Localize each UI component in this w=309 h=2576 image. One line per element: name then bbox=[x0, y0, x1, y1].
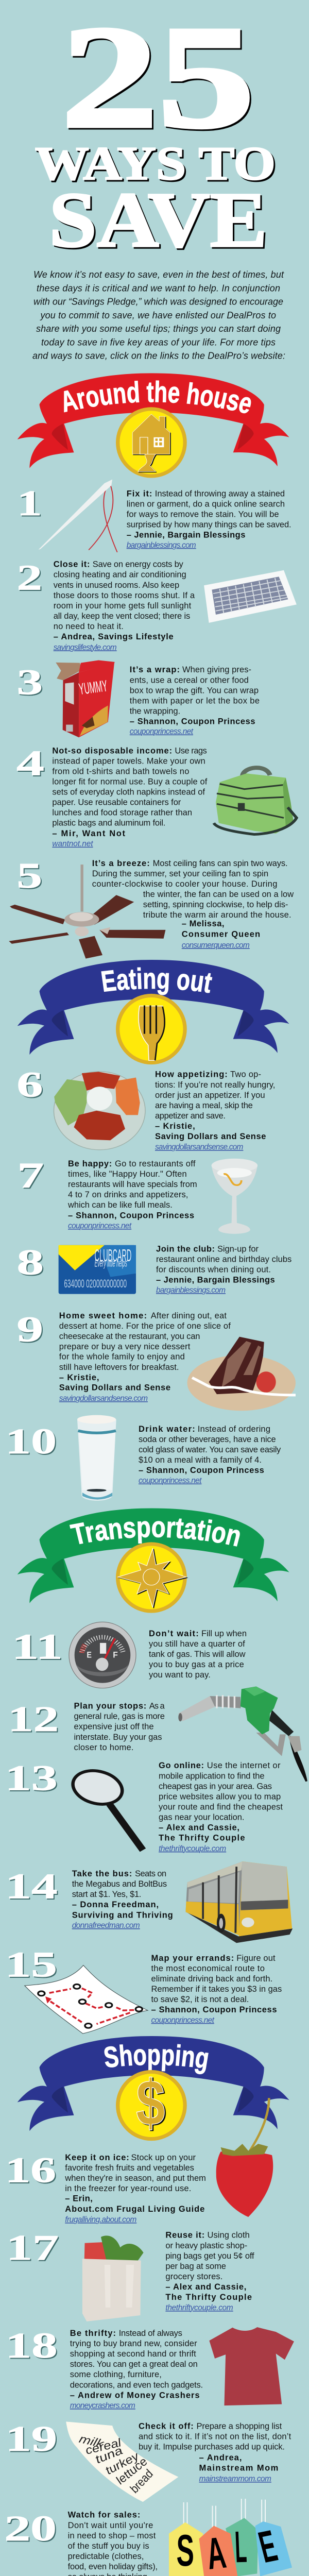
tip text: those doors to those rooms shut. If a bbox=[54, 591, 195, 600]
icon: fuel gauge: F bbox=[113, 1650, 118, 1659]
tip text bbox=[74, 1702, 165, 1752]
tip text: shopping at second hand or thrift bbox=[70, 2349, 196, 2359]
icon: shopping list bbox=[66, 2421, 178, 2502]
tip text: Drink water: bbox=[139, 1425, 195, 1434]
tip text: you to buy gas at a price bbox=[149, 1660, 244, 1669]
icon: gas pump nozzle bbox=[178, 1686, 306, 1782]
icon: sale tags: L bbox=[234, 2522, 248, 2572]
tip text bbox=[149, 1629, 247, 1680]
tip text: It’s a breeze: bbox=[92, 859, 150, 868]
tip text: – Alex and Cassie, bbox=[165, 2282, 246, 2292]
tip text: Go online: bbox=[159, 1761, 204, 1770]
intro text bbox=[32, 269, 285, 361]
tip text bbox=[151, 1954, 282, 2025]
tip text: your route and find the cheapest bbox=[159, 1802, 283, 1811]
tip text: donnafreedman.com bbox=[72, 1921, 140, 1930]
tip text: Close it: bbox=[54, 560, 90, 569]
tip text: Use the internet or bbox=[207, 1761, 281, 1770]
tip text: Seats on bbox=[135, 1869, 166, 1878]
icon: ceiling fan bbox=[9, 865, 165, 959]
tip 8: join the club bbox=[16, 1243, 291, 1295]
number 14: 14 bbox=[5, 1867, 58, 1906]
tip text: – Shannon, Coupon Princess bbox=[130, 717, 255, 726]
tip text: tank of gas. This will allow bbox=[149, 1650, 246, 1659]
tip text: Most ceiling fans can spin two ways. bbox=[153, 859, 288, 868]
icon: needle and thread bbox=[39, 480, 117, 552]
number 3: 3 bbox=[16, 663, 43, 702]
tip text: – Alex and Cassie, bbox=[159, 1823, 239, 1832]
tip text bbox=[70, 2329, 203, 2410]
number 16: 16 bbox=[5, 2150, 56, 2191]
ribbon: around the house bbox=[18, 373, 289, 478]
tip 9: home sweet home bbox=[16, 1310, 296, 1411]
tip text: and stick to it. If it’s not on the list, don’t bbox=[139, 2432, 291, 2441]
tip text: Remember if it takes you $3 in gas bbox=[151, 1985, 282, 1994]
tip 8: join the club: Every little helps bbox=[95, 1257, 127, 1269]
tip text: Two op- bbox=[230, 1070, 261, 1079]
ribbon: shopping: Shopping bbox=[104, 2044, 209, 2074]
icon: fuel gauge: E bbox=[87, 1650, 92, 1659]
tip 10: drink water bbox=[5, 1415, 281, 1501]
icon: sale tags: E bbox=[254, 2521, 282, 2572]
tip text: Figure out bbox=[236, 1954, 276, 1963]
icon: glass of water bbox=[77, 1415, 116, 1501]
tip text bbox=[64, 2153, 206, 2224]
tip text: couponprincess.net bbox=[68, 1222, 132, 1230]
number 2: 2 bbox=[16, 558, 42, 598]
icon: fuel gauge bbox=[69, 1622, 136, 1688]
tip text bbox=[68, 2511, 272, 2576]
icon: air vent bbox=[204, 570, 297, 623]
icon: shopping list: cereal bbox=[84, 2436, 123, 2457]
tip 12: plan your stops bbox=[8, 1686, 306, 1782]
number 4: 4 bbox=[16, 744, 44, 784]
icon: shopping list: milk bbox=[78, 2432, 106, 2451]
tip text: frugalliving.about.com bbox=[65, 2215, 136, 2224]
tip text: Go to restaurants off bbox=[115, 1159, 196, 1168]
tip text: bargainblessings.com bbox=[156, 1286, 226, 1295]
tip text: Instead of throwing away a stained bbox=[155, 489, 285, 498]
tip text: savingdollarsandsense.com bbox=[59, 1394, 148, 1403]
icon: magnifying glass bbox=[68, 1765, 143, 1850]
tip text: ents, use a cereal or other food bbox=[130, 675, 249, 685]
tip 11: don't wait bbox=[12, 1622, 247, 1688]
icon: chocolate cake bbox=[187, 1337, 296, 1411]
ribbon: eating out bbox=[18, 960, 289, 1064]
number 11: 11 bbox=[12, 1627, 63, 1667]
tip text: setting, spinning clockwise, to help dis- bbox=[143, 900, 288, 909]
tip text: of the stuff you buy is bbox=[68, 2541, 149, 2551]
ribbon: transportation: Transportation bbox=[69, 1519, 240, 1547]
intro text: you to commit to save, we have enlisted our DealPros to bbox=[39, 310, 276, 320]
tip text: eliminate driving back and forth. bbox=[151, 1974, 272, 1984]
tip text: tribute the warm air around the house. bbox=[143, 910, 291, 920]
tip text: – Jennie, Bargain Blessings bbox=[127, 531, 245, 540]
tip text: expensive just off the bbox=[74, 1722, 153, 1732]
tip text: in the freezer for year-round use. bbox=[65, 2184, 191, 2193]
tip text: After dining out, eat bbox=[151, 1311, 227, 1320]
tip 13: go online bbox=[5, 1759, 283, 1853]
number 20: 20 bbox=[4, 2509, 57, 2549]
number 10: 10 bbox=[5, 1422, 57, 1462]
number 15: 15 bbox=[5, 1945, 57, 1985]
number 6: 6 bbox=[16, 1065, 43, 1105]
number 7: 7 bbox=[18, 1156, 44, 1195]
tip text: appetizer and save. bbox=[155, 1111, 226, 1121]
number 12: 12 bbox=[8, 1700, 59, 1739]
tip text: – Erin, bbox=[65, 2194, 93, 2204]
tip text: are having a meal, skip the bbox=[155, 1101, 253, 1110]
tip text: Prepare a shopping list bbox=[197, 2421, 282, 2431]
tip text: order just an appetizer. If you bbox=[155, 1091, 265, 1100]
number 13: 13 bbox=[5, 1759, 58, 1798]
tip text: Fix it: bbox=[127, 489, 152, 498]
tip text: or heavy plastic shop- bbox=[165, 2241, 247, 2250]
tip text: thethriftycouple.com bbox=[165, 2303, 233, 2312]
panel: eating out bbox=[5, 960, 296, 1501]
number 19: 19 bbox=[6, 2419, 57, 2459]
tip text: wantnot.net bbox=[52, 840, 93, 849]
tip text: for the whole family to enjoy and bbox=[59, 1352, 185, 1361]
ribbon: around the house: Around the house bbox=[64, 380, 251, 413]
tip text: – Andrew of Money Crashers bbox=[70, 2391, 200, 2400]
tip text: the winter, the fan can be used on a low bbox=[143, 890, 294, 899]
tip text: Be happy: bbox=[68, 1159, 112, 1168]
tip text: tions: If you’re not really hungry, bbox=[155, 1080, 275, 1090]
tip 18: be thrifty bbox=[6, 2326, 294, 2410]
number 17: 17 bbox=[6, 2228, 59, 2268]
tip text: you want to pay. bbox=[149, 1670, 211, 1680]
tip text bbox=[67, 1159, 197, 1230]
icon: shopping list: lettuce bbox=[113, 2455, 150, 2487]
tip text: which can be like full meals. bbox=[67, 1200, 173, 1210]
tip text: them with paper or let the box be bbox=[130, 696, 260, 705]
tip text: moneycrashers.com bbox=[70, 2401, 135, 2410]
tip 17: reuse it bbox=[6, 2228, 254, 2321]
tip text: Surviving and Thriving bbox=[72, 1910, 173, 1920]
tip text: start at $1. Yes, $1. bbox=[72, 1890, 141, 1899]
icon: grocery bag bbox=[82, 2235, 144, 2321]
tip text: soda or other beverages, have a nice bbox=[139, 1435, 276, 1444]
tip text: paper. Use reusable containers for bbox=[52, 798, 181, 807]
tip text bbox=[155, 1070, 275, 1151]
tip text: – Kristie, bbox=[59, 1373, 99, 1382]
intro text: share with you some useful tips; things you can start doing bbox=[36, 324, 281, 334]
tip text: closer to home. bbox=[74, 1743, 134, 1752]
tip text: Be thrifty: bbox=[70, 2329, 116, 2338]
tip text: cheesecake at the restaurant, you can bbox=[59, 1332, 200, 1341]
tip text: It’s a wrap: bbox=[130, 665, 180, 674]
tip text: prepare or buy a very nice dessert bbox=[59, 1342, 191, 1351]
tip text: Fill up when bbox=[201, 1629, 247, 1638]
tip text: couponprincess.net bbox=[130, 727, 194, 736]
tip text: you still have a quarter of bbox=[149, 1639, 245, 1649]
icon: club card bbox=[59, 1245, 136, 1294]
tip 16: keep it on ice bbox=[5, 2098, 273, 2224]
tip text: – Andrea, bbox=[199, 2453, 242, 2463]
tip text bbox=[130, 665, 260, 736]
tip 4: not-so disposable income bbox=[16, 744, 297, 849]
tip text: ping bags get you 5¢ off bbox=[165, 2251, 254, 2261]
tip text: stores. You can get a great deal on bbox=[70, 2360, 198, 2369]
tip text: Mainstream Mom bbox=[199, 2463, 278, 2472]
tip text: to save $2, it is not a deal. bbox=[151, 1995, 249, 2004]
icon: cereal box bbox=[56, 660, 115, 737]
tip text: – Jennie, Bargain Blessings bbox=[156, 1276, 275, 1285]
tip text bbox=[139, 2421, 291, 2483]
number 18: 18 bbox=[6, 2326, 58, 2366]
tip 19: check it off bbox=[6, 2419, 291, 2502]
tip text: food, even holiday gifts), bbox=[68, 2562, 158, 2571]
tip text: room in your home gets full sunlight bbox=[54, 601, 192, 611]
icon: shopping list: turkey bbox=[102, 2449, 143, 2477]
icon: wings plate bbox=[54, 1072, 145, 1150]
icon: sale tags: S bbox=[176, 2526, 194, 2575]
tip text: – Donna Freedman, bbox=[72, 1900, 159, 1909]
tip text: lunches and food storage rather than bbox=[52, 808, 192, 818]
tip 6: how appetizing bbox=[16, 1065, 275, 1151]
tip text: longer fit for normal use. Buy a couple of bbox=[52, 777, 208, 786]
icon: sale tags bbox=[169, 2499, 292, 2576]
tip text bbox=[52, 746, 208, 849]
tip text: 4 to 7 on drinks and appetizers, bbox=[68, 1190, 188, 1199]
icon: route map bbox=[25, 1965, 148, 2033]
tip text: bargainblessings.com bbox=[127, 541, 196, 550]
tip text: closing heating and air conditioning bbox=[54, 570, 186, 580]
tip text bbox=[127, 489, 291, 550]
tip text: Home sweet home: bbox=[59, 1311, 147, 1320]
tip text: general rule, gas is more bbox=[74, 1712, 165, 1721]
tip text: mobile application to find the bbox=[159, 1771, 265, 1781]
tip text: Stock up on your bbox=[131, 2153, 196, 2162]
tip text: grocery stores. bbox=[165, 2272, 222, 2281]
number 5: 5 bbox=[16, 856, 42, 896]
title bbox=[35, 0, 276, 264]
panel: around the house bbox=[9, 373, 299, 959]
tip text bbox=[165, 2231, 254, 2312]
tip text: mainstreammom.com bbox=[199, 2475, 271, 2483]
icon: red t-shirt bbox=[209, 2327, 294, 2405]
tip text: Plan your stops: bbox=[74, 1702, 146, 1711]
tip text: Sign-up for bbox=[217, 1245, 259, 1254]
intro text: We know it’s not easy to save, even in the best of times, but bbox=[33, 269, 284, 280]
tip text: interstate. Buy your gas bbox=[74, 1733, 162, 1742]
tip text: favorite fresh fruits and vegetables bbox=[65, 2163, 194, 2173]
tip text: Don’t wait: bbox=[149, 1629, 199, 1638]
tip text: As a bbox=[149, 1702, 165, 1711]
tip text: Reuse it: bbox=[165, 2231, 204, 2240]
tip text: the wrapping. bbox=[130, 706, 180, 716]
tip text: – Melissa, bbox=[182, 919, 225, 928]
tip text: decorations, and even tech gadgets. bbox=[70, 2380, 203, 2389]
tip text: some clothing, furniture, bbox=[70, 2370, 162, 2379]
tip text: restaurant online and birthday clubs bbox=[156, 1255, 291, 1264]
tip text: Don't wait until you're bbox=[68, 2521, 153, 2530]
icon: compass star bbox=[118, 1548, 186, 1607]
tip text: per bag at some bbox=[165, 2262, 226, 2271]
tip text: dessert at home. For the price of one slice of bbox=[59, 1321, 231, 1331]
tip 2: close it bbox=[16, 558, 297, 652]
tip text: Saving Dollars and Sense bbox=[155, 1132, 266, 1141]
tip text: Using cloth bbox=[207, 2231, 250, 2240]
tip text: – Shannon, Coupon Princess bbox=[151, 2005, 277, 2014]
icon: shopping list: tuna bbox=[93, 2444, 125, 2466]
tip text: savingslifestyle.com bbox=[54, 643, 117, 652]
tip text: buy it. Impulse purchases add up quick. bbox=[139, 2443, 285, 2452]
tip 14: take the bus bbox=[5, 1861, 293, 1943]
tip text: sets of everyday cloth napkins instead of bbox=[52, 788, 205, 797]
title: SAVE bbox=[49, 177, 267, 264]
tip text: savingdollarsandsense.com bbox=[155, 1143, 243, 1151]
tip text: Saving Dollars and Sense bbox=[59, 1383, 170, 1393]
tip 7: be happy bbox=[18, 1156, 258, 1234]
tip text: Use rags bbox=[175, 746, 207, 755]
tip text: the most economical route to bbox=[151, 1964, 265, 1973]
icon: club card: 634000 020000000000 bbox=[64, 1277, 127, 1290]
tip text: Join the club: bbox=[156, 1245, 215, 1254]
tip 20: watch for sales bbox=[4, 2499, 292, 2576]
tip text: plastic bags and aluminum foil. bbox=[52, 819, 165, 828]
tip text: couponprincess.net bbox=[139, 1477, 202, 1485]
icon: shopping list: bread bbox=[127, 2467, 157, 2496]
icon: house bbox=[132, 414, 170, 471]
tip text: restaurants will have specials from bbox=[68, 1180, 197, 1189]
icon: fork bbox=[139, 1006, 165, 1060]
tip text: Watch for sales: bbox=[68, 2511, 140, 2520]
tip text: Not-so disposable income: bbox=[52, 746, 172, 755]
tip text: for discounts when dining out. bbox=[156, 1265, 271, 1275]
tip text bbox=[139, 1425, 281, 1485]
tip 8: join the club: CLUBCARD bbox=[95, 1245, 131, 1265]
tip text: predictable (clothes, bbox=[68, 2552, 144, 2561]
tip text: Instead of ordering bbox=[198, 1425, 270, 1434]
tip text: Save on energy costs by bbox=[93, 560, 184, 569]
ribbon: eating out: Eating out bbox=[101, 968, 212, 995]
tip text: cheapest gas in your area. Gas bbox=[159, 1782, 272, 1791]
tip text: the Megabus and BoltBus bbox=[72, 1879, 167, 1889]
tip text bbox=[72, 1869, 173, 1930]
tip text: Take the bus: bbox=[72, 1869, 132, 1878]
tip text: box to wrap the gift. You can wrap bbox=[130, 686, 259, 695]
tip text: consumerqueen.com bbox=[182, 941, 250, 950]
tip text: Check it off: bbox=[139, 2421, 194, 2431]
number 8: 8 bbox=[16, 1243, 44, 1283]
icon: strawberry bbox=[216, 2098, 273, 2217]
number 9: 9 bbox=[16, 1310, 43, 1350]
title: 25 bbox=[61, 0, 254, 158]
tip text: in need to shop – most bbox=[68, 2531, 156, 2540]
panel: shopping bbox=[4, 2036, 294, 2576]
tip text: Instead of always bbox=[119, 2329, 182, 2338]
tip text bbox=[59, 1311, 231, 1403]
tip text: for ways to remove the stain. You will be bbox=[127, 510, 279, 519]
tip text: when they're in season, and put them bbox=[64, 2174, 206, 2183]
icon: dollar sign: $ bbox=[136, 2067, 165, 2139]
tip 5: it's a breeze bbox=[9, 856, 294, 959]
tip text: The Thrifty Couple bbox=[159, 1834, 245, 1843]
tip text: – Shannon, Coupon Princess bbox=[68, 1211, 194, 1220]
icon: cereal box: YUMMY bbox=[78, 677, 109, 699]
tip text: trying to buy brand new, consider bbox=[70, 2339, 197, 2348]
tip text: vents in unused rooms. Also keep bbox=[54, 581, 179, 590]
intro text: and ways to save, click on the links to the DealPro’s website: bbox=[32, 350, 285, 361]
tip 3: it's a wrap bbox=[16, 660, 260, 737]
title: WAYS TO bbox=[35, 137, 276, 190]
tip text: – Andrea, Savings Lifestyle bbox=[54, 632, 174, 641]
tip text: How appetizing: bbox=[155, 1070, 228, 1079]
tip text: When giving pres- bbox=[182, 665, 251, 674]
tip text: gas near your location. bbox=[159, 1812, 244, 1822]
intro text: with our “Savings Pledge,” which was designed to encourage bbox=[33, 297, 283, 307]
ribbon: transportation bbox=[18, 1509, 289, 1613]
tip text: times, like "Happy Hour." Often bbox=[68, 1170, 187, 1179]
tip text: $10 on a meal with a family of 4. bbox=[139, 1455, 262, 1465]
tip text: surprised by how many things can be saved. bbox=[127, 520, 291, 530]
tip text: instead of paper towels. Make your own bbox=[52, 756, 205, 766]
tip text bbox=[159, 1761, 283, 1853]
tip text: couponprincess.net bbox=[151, 2016, 215, 2025]
tip 1: fix it bbox=[17, 480, 291, 552]
tip text: counter-clockwise to cooler your house. During bbox=[92, 879, 277, 889]
tip text: Map your errands: bbox=[151, 1954, 234, 1963]
panel: transportation bbox=[5, 1509, 307, 2034]
icon: martini glass bbox=[212, 1159, 258, 1234]
tip text: – Shannon, Coupon Princess bbox=[139, 1466, 264, 1475]
tip text bbox=[92, 859, 294, 950]
tip text: still have leftovers for breakfast. bbox=[59, 1363, 179, 1372]
tip text: no need to heat it. bbox=[54, 622, 124, 631]
tip text: all day, keep the vent closed; there is bbox=[54, 612, 190, 621]
tip text: During the summer, set your ceiling fan to spin bbox=[92, 869, 268, 878]
tip text: from old t-shirts and bath towels no bbox=[52, 767, 189, 776]
tip text: linen or garment, do a quick online search bbox=[127, 500, 285, 509]
tip text: About.com Frugal Living Guide bbox=[65, 2205, 204, 2214]
icon: green lunch bag bbox=[214, 768, 297, 835]
tip text: Keep it on ice: bbox=[65, 2153, 129, 2162]
tip text: thethriftycouple.com bbox=[159, 1844, 226, 1853]
tip text: cold glass of water. You can save easily bbox=[139, 1445, 281, 1454]
tip text: The Thrifty Couple bbox=[165, 2293, 252, 2302]
intro text: today to save in five key areas of your life. For more tips bbox=[41, 337, 276, 347]
icon: yellow bus bbox=[185, 1861, 293, 1943]
ribbon: shopping bbox=[18, 2036, 289, 2141]
tip 15: map your errands bbox=[5, 1945, 282, 2033]
tip text: – Kristie, bbox=[155, 1122, 195, 1131]
tip text: – Mir, Want Not bbox=[52, 829, 126, 838]
tip text: Consumer Queen bbox=[182, 929, 260, 939]
tip text bbox=[156, 1245, 291, 1295]
tip text: price websites allow you to map bbox=[159, 1792, 281, 1801]
intro text: these days it is critical and we want to help. In conjunction bbox=[37, 283, 280, 294]
tip text bbox=[54, 560, 195, 652]
number 1: 1 bbox=[17, 484, 42, 523]
